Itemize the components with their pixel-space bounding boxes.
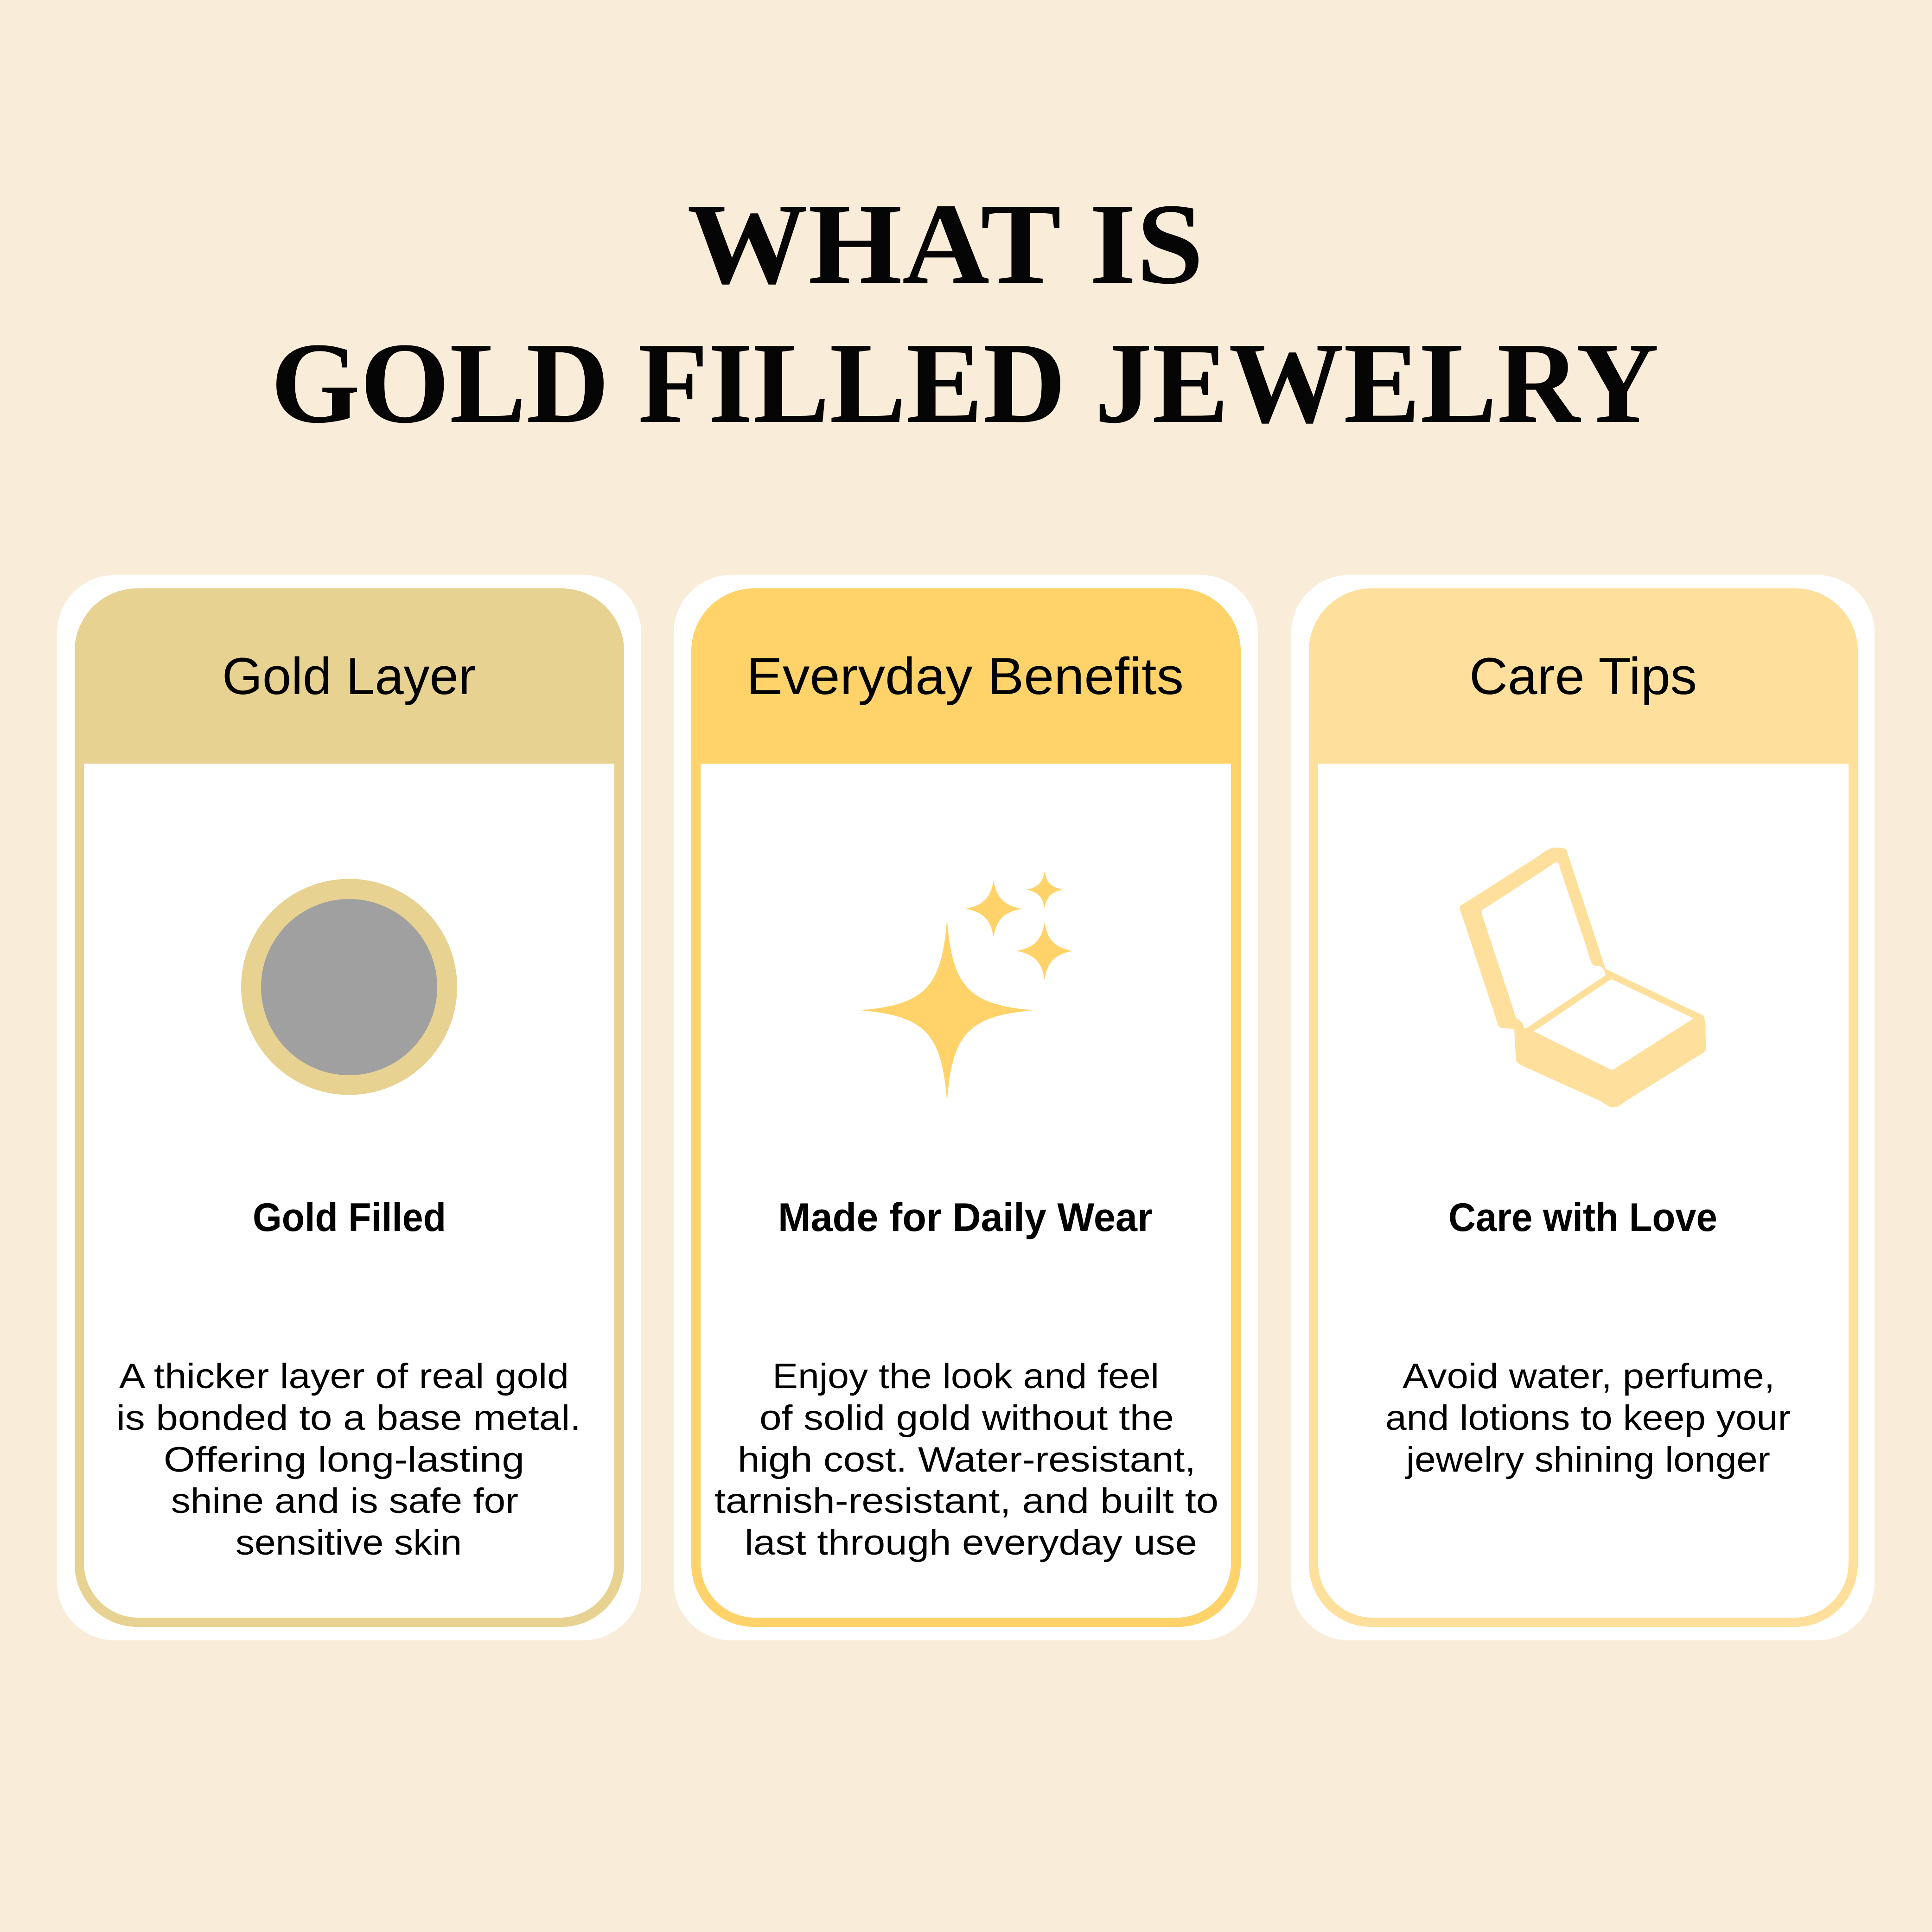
text block: gold layer description: is bonded to a base metal. [116,1398,581,1438]
subheading: gold filled: Gold Filled [253,1195,446,1240]
icon: sparkles [860,871,1073,1102]
icon: gold filled circle [241,879,457,1095]
panel: gold layer [57,575,641,1640]
icon: open jewelry box [1460,848,1706,1107]
subheading: care with love: Care with Love [1448,1195,1717,1240]
heading: gold layer: Gold Layer [222,647,476,705]
text block: everyday benefits description: high cost. Water-resistant, [738,1440,1196,1479]
text block: everyday benefits description: tarnish-resistant, and built to [714,1481,1218,1521]
heading: everyday benefits: Everyday Benefits [746,647,1184,705]
text block: care tips description: jewelry shining longer [1405,1440,1770,1479]
heading: care tips: Care Tips [1469,647,1697,705]
panel: everyday benefits [674,575,1258,1640]
text block: care tips description: and lotions to keep your [1385,1398,1791,1438]
text block: everyday benefits description [714,1357,1218,1562]
title: WHAT IS [687,180,1204,308]
text block: everyday benefits description: of solid gold without the [759,1398,1174,1438]
text block: everyday benefits description: last through everyday use [745,1523,1197,1562]
text block: everyday benefits description: Enjoy the look and feel [772,1357,1159,1396]
text block: gold layer description: shine and is safe for [171,1481,518,1521]
text block: gold layer description: Offering long-lasting [164,1440,524,1479]
text block: care tips description [1385,1357,1791,1479]
subheading: made for daily wear: Made for Daily Wear [778,1195,1153,1240]
text block: gold layer description [116,1357,581,1562]
title [271,180,1659,447]
text block: gold layer description: sensitive skin [236,1523,462,1562]
panel: care tips [1291,575,1875,1640]
title: GOLD FILLED JEWELRY [271,319,1659,447]
text block: care tips description: Avoid water, perfume, [1403,1357,1775,1396]
text block: gold layer description: A thicker layer of real gold [119,1357,569,1396]
